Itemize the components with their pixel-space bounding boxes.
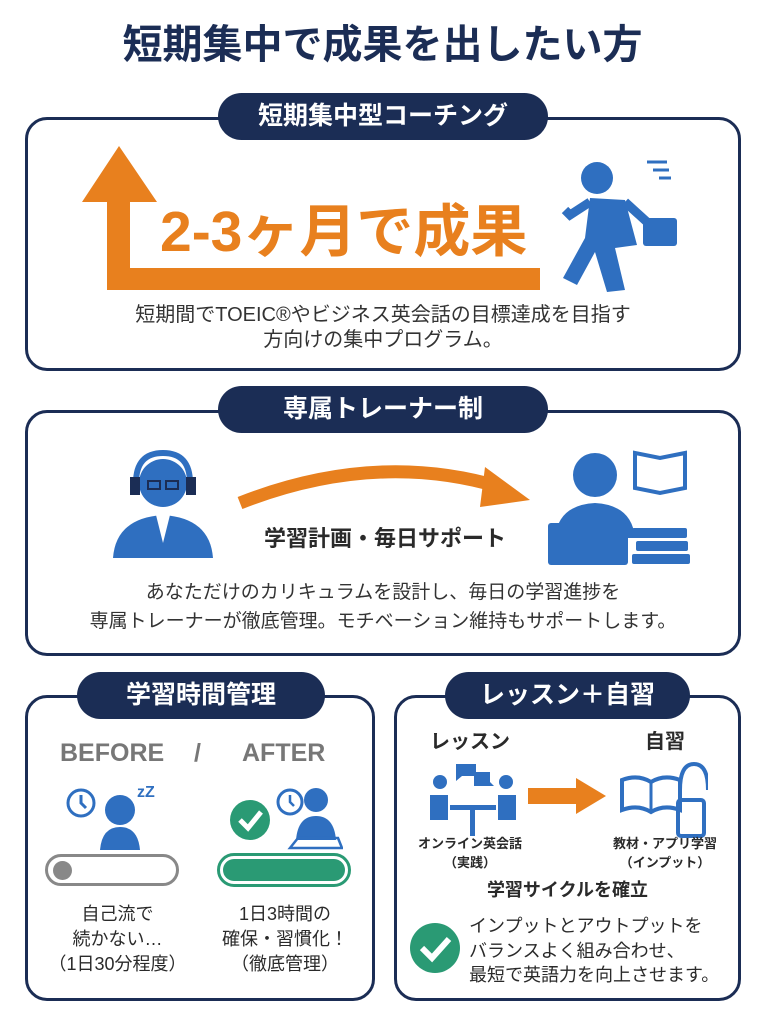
- icon: online lesson people: [430, 764, 516, 836]
- text: materials caption: 教材・アプリ学習: [613, 836, 717, 851]
- text: before after labels: BEFORE: [60, 739, 164, 767]
- panel: short-term coaching: [25, 117, 741, 371]
- text: cycle description: バランスよく組み合わせ、: [469, 940, 685, 960]
- panel: dedicated trainer: [25, 410, 741, 656]
- text: before after labels: AFTER: [242, 739, 325, 767]
- text: after description: [222, 904, 348, 974]
- icon: sleepy person: zZ: [137, 784, 155, 801]
- text: before description: [48, 904, 187, 974]
- icon: sleepy person: [66, 784, 155, 850]
- heading: short-term coaching: [218, 93, 548, 140]
- text: before description: （1日30分程度）: [48, 954, 187, 974]
- heading: study time management: [77, 672, 325, 719]
- text: before description: 自己流で: [82, 904, 154, 924]
- title: 短期集中で成果を出したい方: [122, 23, 642, 67]
- text: before after labels: /: [194, 739, 201, 767]
- text: learning cycle heading: 学習サイクルを確立: [487, 880, 648, 900]
- text: after description: 1日3時間の: [239, 904, 331, 924]
- text: before after labels: [60, 739, 325, 767]
- heading: lesson plus self-study: [445, 672, 690, 719]
- text: cycle description: インプットとアウトプットを: [469, 916, 702, 936]
- icon: learner with laptop: [548, 450, 690, 565]
- toggle: before: [45, 854, 179, 886]
- text: cycle description: [469, 916, 719, 985]
- text: coaching description: 方向けの集中プログラム。: [263, 329, 503, 351]
- heading: dedicated trainer: 専属トレーナー制: [283, 395, 483, 423]
- text: self-study label: 自習: [645, 731, 685, 753]
- panel: study time management: [25, 695, 375, 1001]
- text: coaching description: 短期間でTOEIC®やビジネス英会話の目標達成を目指す: [135, 304, 631, 326]
- icon: trainer with headset: [113, 450, 213, 558]
- icon: check and studying person: [230, 788, 343, 850]
- text: online english caption: （実践）: [444, 855, 496, 870]
- text: lesson label: レッスン: [430, 731, 510, 753]
- icon: green check: [410, 923, 460, 973]
- text: cycle description: 最短で英語力を向上させます。: [469, 965, 719, 985]
- text: materials caption: （インプット）: [620, 855, 710, 870]
- text: before description: 続かない…: [72, 929, 162, 949]
- text: after description: （徹底管理）: [231, 954, 339, 974]
- icon: running businessman: [562, 160, 677, 292]
- heading: dedicated trainer: [218, 386, 548, 433]
- toggle: after: [217, 853, 351, 887]
- heading: short-term coaching: 短期集中型コーチング: [258, 102, 508, 130]
- chart: orange arrow: [82, 146, 540, 290]
- text: after description: 確保・習慣化！: [222, 929, 348, 949]
- arrow: orange right: [528, 778, 606, 814]
- panel: lesson plus self-study: [394, 695, 741, 1001]
- text: trainer description: [90, 582, 676, 632]
- heading: lesson plus self-study: レッスン＋自習: [480, 681, 655, 709]
- arrow: curved orange: [238, 465, 530, 509]
- text: materials caption: [613, 836, 717, 870]
- text: coaching description: [135, 304, 631, 351]
- heading: study time management: 学習時間管理: [126, 681, 276, 709]
- text: online english caption: [418, 836, 522, 870]
- icon: book and tablet headphones: [620, 762, 708, 838]
- text: online english caption: オンライン英会話: [418, 836, 522, 851]
- text: study plan daily support: 学習計画・毎日サポート: [264, 526, 506, 551]
- headline number: 2-3ヶ月で成果: [160, 200, 527, 264]
- text: trainer description: あなただけのカリキュラムを設計し、毎日の学習進捗を: [146, 582, 620, 603]
- text: trainer description: 専属トレーナーが徹底管理。モチベーション維持もサポートします。: [90, 611, 676, 632]
